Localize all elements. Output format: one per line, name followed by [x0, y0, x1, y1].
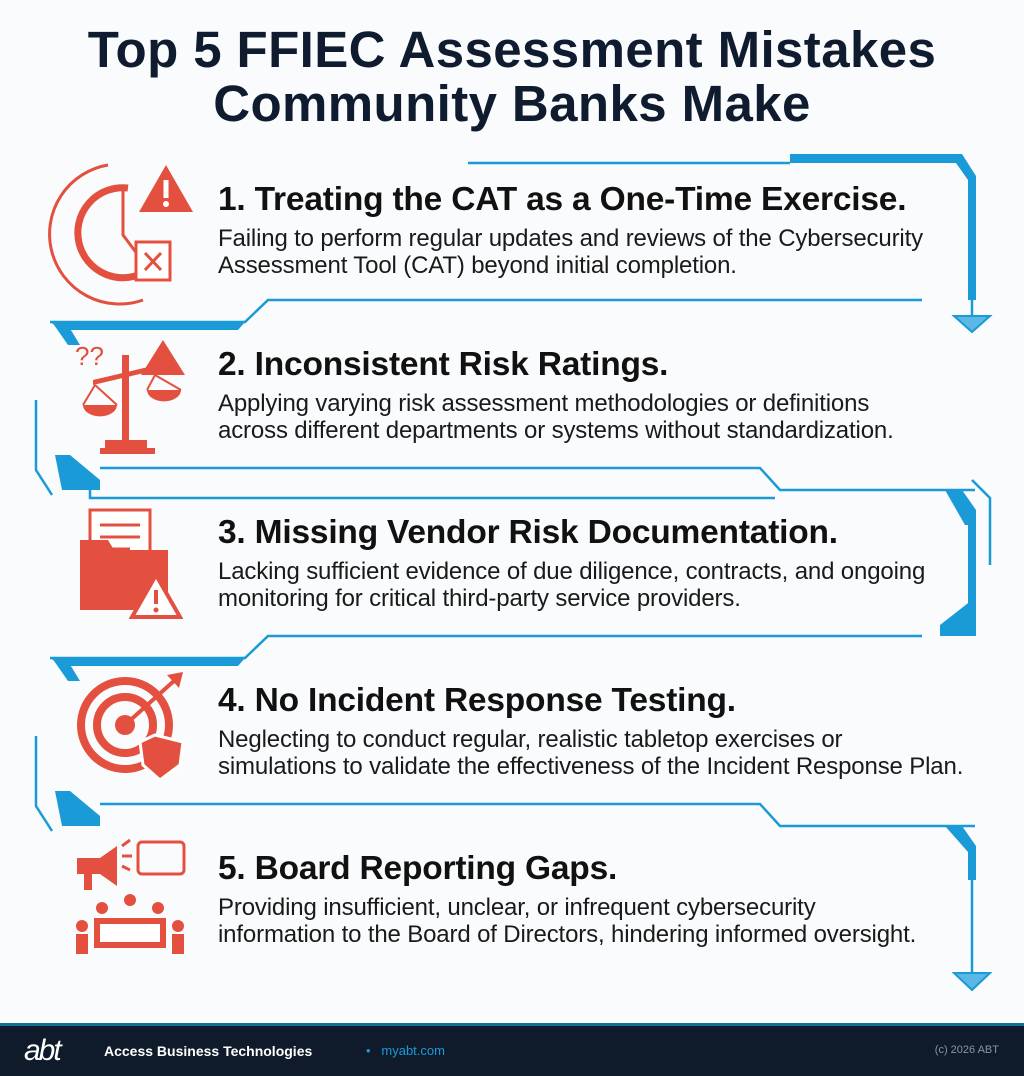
item 1: Assessment Tool (CAT) beyond initial completion.	[218, 252, 737, 279]
item 1	[218, 181, 923, 279]
company name: Access Business Technologies	[104, 1043, 312, 1059]
icon: scales: ??	[75, 341, 104, 371]
item 4: simulations to validate the effectiveness of the Incident Response Plan.	[218, 753, 963, 780]
item 3	[218, 514, 925, 612]
icon: target with shield	[77, 672, 183, 778]
item 4	[218, 682, 963, 780]
item 5	[218, 850, 916, 948]
item 4: Neglecting to conduct regular, realistic tabletop exercises or	[218, 726, 842, 753]
copyright: (c) 2026 ABT	[935, 1044, 999, 1056]
item 2	[218, 346, 894, 444]
connector: odd panel frame 5	[945, 826, 976, 975]
connector: even panel frame 4	[36, 658, 975, 831]
item 3: Lacking sufficient evidence of due diligence, contracts, and ongoing	[218, 558, 925, 585]
arrow: down 1	[954, 316, 990, 332]
item 4: 4. No Incident Response Testing.	[218, 682, 736, 719]
item 3: 3. Missing Vendor Risk Documentation.	[218, 514, 838, 551]
connector: odd panel frame 1	[50, 154, 976, 330]
item 2: 2. Inconsistent Risk Ratings.	[218, 346, 668, 383]
item 1: 1. Treating the CAT as a One-Time Exercise.	[218, 181, 906, 218]
item 5: 5. Board Reporting Gaps.	[218, 850, 617, 887]
title: Top 5 FFIEC Assessment Mistakes	[88, 21, 936, 78]
icon: folder with warning	[80, 508, 183, 619]
item 3: monitoring for critical third-party service providers.	[218, 585, 741, 612]
arrow: down 5	[954, 973, 990, 990]
item 1: Failing to perform regular updates and reviews of the Cybersecurity	[218, 225, 923, 252]
title: Community Banks Make	[213, 75, 811, 132]
footer	[0, 1023, 1024, 1076]
icon: scales	[75, 340, 185, 454]
connector: even panel frame 2	[36, 322, 990, 565]
item 2: Applying varying risk assessment methodologies or definitions	[218, 390, 869, 417]
item 5: Providing insufficient, unclear, or infrequent cybersecurity	[218, 894, 816, 921]
title	[88, 21, 936, 132]
logo: abt	[24, 1034, 60, 1067]
icon: clock with warning	[48, 164, 193, 306]
item 5: information to the Board of Directors, hindering informed oversight.	[218, 921, 916, 948]
icon: megaphone and meeting	[76, 838, 186, 954]
item 2: across different departments or systems without standardization.	[218, 417, 894, 444]
website: • myabt.com	[366, 1043, 445, 1058]
connector: odd panel frame 3	[50, 490, 976, 666]
